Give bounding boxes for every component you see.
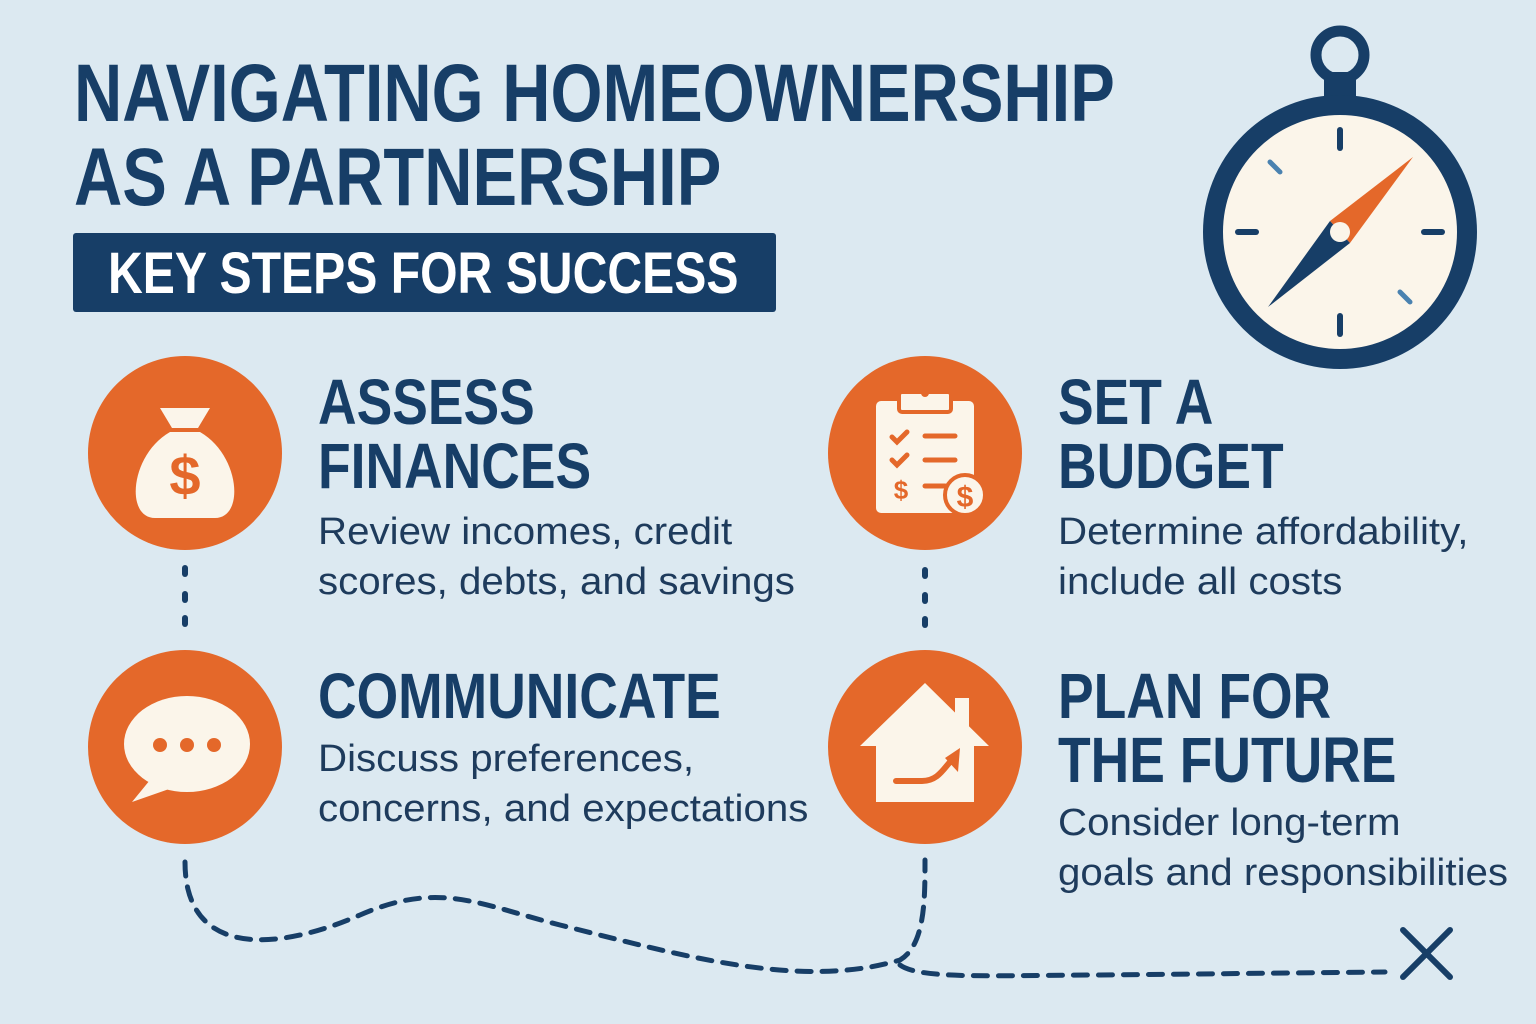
icon: budget clipboard: $ [894,475,909,505]
step: communicate: COMMUNICATE [318,660,721,732]
title: NAVIGATING HOMEOWNERSHIP [74,48,1115,139]
icon: speech bubble [88,650,282,844]
step: assess finances: FINANCES [318,430,591,502]
step: set a budget [1058,366,1468,603]
step: set a budget: BUDGET [1058,430,1284,502]
step: plan for the future [1058,660,1508,894]
title [74,48,1115,223]
step: assess finances: Review incomes, credit [318,511,732,553]
icon: house with arrow [828,650,1022,844]
connector dots [185,568,925,625]
step: plan for the future: PLAN FOR [1058,660,1331,732]
icon: budget clipboard: $ [957,481,974,514]
step: set a budget: Determine affordability, [1058,511,1468,553]
step: assess finances: scores, debts, and savings [318,561,795,603]
step: set a budget: include all costs [1058,561,1342,603]
icon: compass [1213,31,1467,359]
step: communicate: Discuss preferences, [318,738,694,780]
icon: money bag: $ [169,444,201,507]
dashed path [185,860,1385,976]
step: communicate [318,660,808,830]
step: set a budget: SET A [1058,366,1213,438]
step: communicate: concerns, and expectations [318,788,808,830]
icon: money bag [88,356,282,550]
icon: budget clipboard [828,356,1022,550]
title: AS A PARTNERSHIP [74,132,721,223]
step: plan for the future: Consider long-term [1058,802,1401,844]
icon: X marker [1403,930,1450,977]
subtitle banner: KEY STEPS FOR SUCCESS [108,241,738,306]
step: assess finances: ASSESS [318,366,535,438]
step: plan for the future: goals and responsibilities [1058,852,1508,894]
step: plan for the future: THE FUTURE [1058,724,1396,796]
step: assess finances [318,366,795,603]
